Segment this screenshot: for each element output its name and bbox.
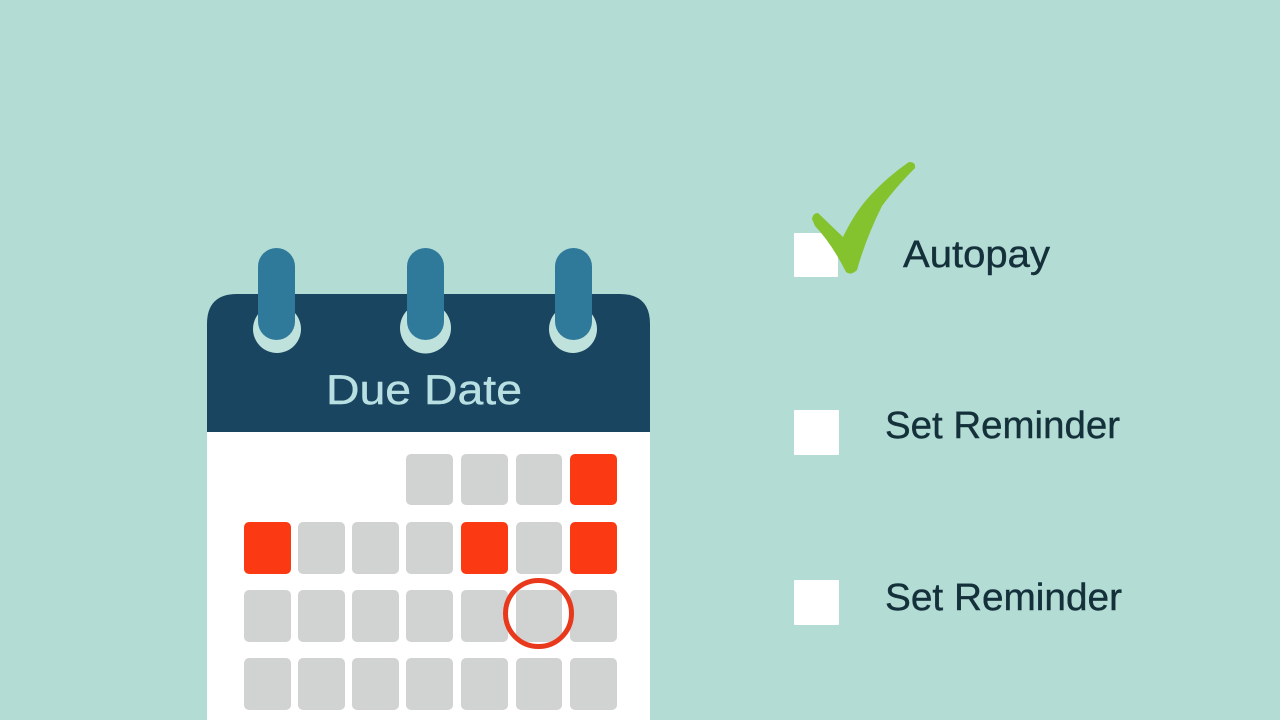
item: set reminder 1 <box>794 405 1120 455</box>
header title: Due Date <box>326 366 522 413</box>
calendar body <box>207 420 650 720</box>
item: autopay: Autopay <box>903 234 1050 276</box>
icon: green check mark <box>812 162 915 274</box>
calendar <box>207 248 650 720</box>
item: set reminder 2: Set Reminder <box>885 577 1122 619</box>
item: set reminder 1: Set Reminder <box>885 405 1120 447</box>
binder rings <box>253 248 597 354</box>
calendar day grid <box>244 454 617 710</box>
checklist <box>794 162 1122 625</box>
item: autopay <box>794 162 1050 277</box>
item: set reminder 2 <box>794 577 1122 625</box>
due date circle <box>506 580 572 646</box>
calendar header <box>207 294 650 432</box>
